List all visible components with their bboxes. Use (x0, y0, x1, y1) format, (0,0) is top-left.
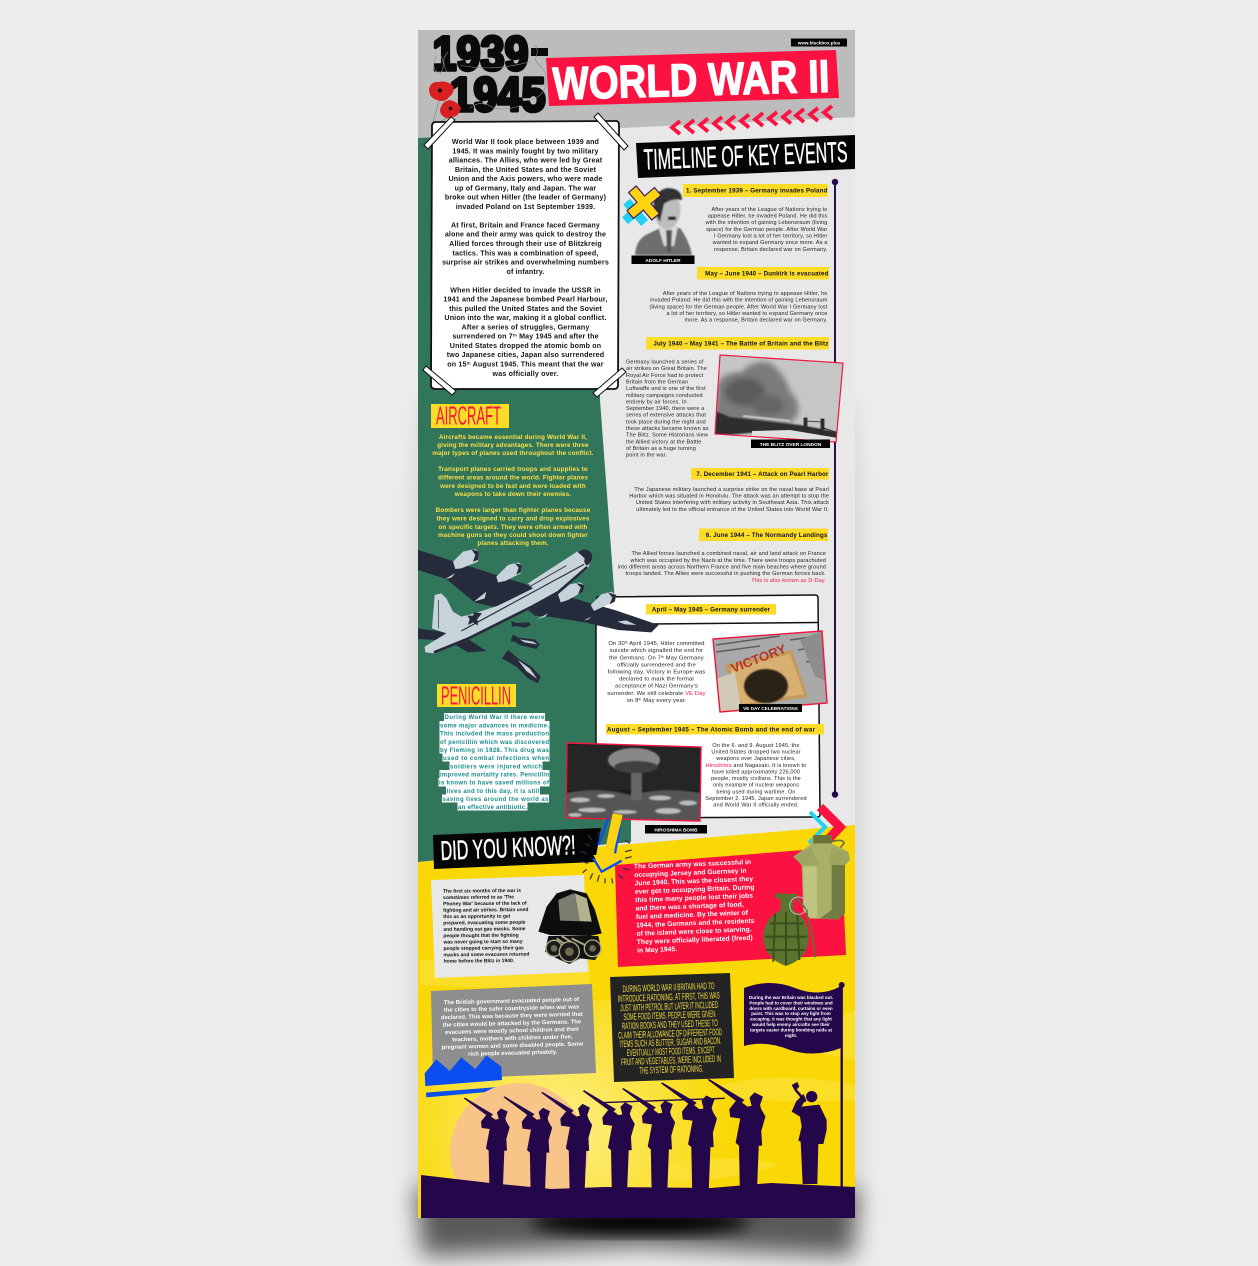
aircraft text: Transport planes carried troops and supplies to (438, 466, 588, 473)
bugler (792, 1082, 827, 1184)
did you know banner (433, 828, 601, 869)
aircraft text: weapons to take down their enemies. (454, 491, 571, 498)
flag with blackout text: paint. This was to stop any light from (751, 1011, 831, 1016)
panel: red fact (615, 847, 846, 967)
event: September 1939: After years of the League of Nations trying to (711, 207, 828, 213)
panel: red fact: ever got to occupying Britain. During (635, 884, 755, 896)
event: atomic bomb: United States dropped two nuclear (711, 750, 801, 756)
timeline heading banner: TIMELINE OF KEY EVENTS (643, 137, 848, 176)
panel: red fact: They were officially liberated (freed) (637, 935, 753, 946)
flag with blackout text: During the war Britain was blacked out. (749, 995, 833, 1000)
event: Battle of Britain: military campaigns conducted (626, 393, 703, 399)
intro text: After a series of struggles, Germany (462, 323, 589, 331)
panel: rationing fact: INTRODUCE RATIONING. AT FIRST, THIS WAS (618, 990, 720, 1005)
brand tag: www.blackbox.plus (797, 40, 841, 45)
intro text: 1945. It was mainly fought by two military (452, 147, 599, 155)
penicillin text: is known to have saved millions of (439, 781, 550, 787)
event: Germany surrender: surrender. We still celebrate VE Day (607, 691, 706, 697)
event: Battle of Britain (626, 337, 829, 459)
event: September 1939: response, Britain declared war on Germany. (714, 247, 828, 253)
bomb 1 (511, 621, 531, 628)
wing highlights (445, 573, 636, 625)
timeline rule (832, 179, 838, 798)
penicillin heading: PENICILLIN (441, 680, 511, 710)
panel: red fact: June 1940. This was the closest they (634, 876, 753, 887)
timeline heading banner (636, 135, 855, 178)
panel: rationing fact (610, 973, 734, 1082)
event: Battle of Britain: air strikes on Great Britain. The (626, 366, 707, 372)
caption: Hiroshima bomb (645, 825, 707, 834)
panel: red fact: of the island were close to starving. (636, 926, 752, 938)
intro text: surprise air strikes and overwhelming numbers (442, 258, 609, 266)
event: Normandy Landings: 6. June 1944 – The Normandy Landings (706, 532, 828, 539)
event: Battle of Britain: Luftwaffe and is one of the first (626, 386, 706, 392)
panel: red fact: fuel and medicine. By the winter of (636, 910, 749, 921)
panel: phoney war fact: this as an opportunity to get (443, 914, 511, 920)
tape strips (423, 113, 628, 397)
poster drop shadow (410, 400, 864, 1256)
event: Germany surrender: th (661, 655, 664, 659)
sun (450, 1083, 588, 1189)
intro text: Britain, the United States and the Soviet (455, 166, 597, 174)
event: Dunkirk: invaded Poland. He did this with the intention of gaining Lebensraum (650, 298, 828, 304)
panel: phoney war fact: home before the Blitz in 1940. (444, 958, 515, 965)
event: atomic bomb: only example of nuclear weapons (713, 783, 799, 789)
penicillin text (438, 713, 550, 811)
aircraft text: Bombers were larger than fighter planes because (436, 507, 591, 514)
intro text: th (513, 333, 517, 338)
panel: phoney war fact: prepared, evacuating some people (443, 920, 526, 926)
aircraft heading: AIRCRAFT (436, 400, 501, 430)
panel: phoney war fact: was never going to start so many (442, 939, 523, 946)
event: atomic bomb: On the 6. and 9. August 1945, the (712, 743, 800, 749)
aircraft text: major types of planes used throughout the conflict. (432, 450, 594, 457)
icon: canteen (793, 835, 850, 919)
icon: grenade (763, 893, 815, 966)
flag with blackout text: night. (785, 1033, 797, 1038)
panel: evacuation fact: pregnant women and some disabled people. Some (442, 1042, 584, 1051)
event: atomic bomb (606, 724, 824, 809)
flag with blackout text (744, 982, 845, 1189)
right wing (528, 593, 659, 632)
event: atomic bomb: people, mostly civilians. This is the (711, 776, 801, 782)
aircraft text (432, 434, 594, 547)
flag with blackout text: would help enemy aircrafts see their (751, 1022, 830, 1027)
panel: phoney war fact: people stopped carrying their gas (443, 945, 524, 952)
event: Germany surrender: declared to mark the formal (619, 677, 694, 683)
caption: Adolf Hitler: ADOLF HITLER (645, 258, 681, 264)
intro text: alliances. The Allies, who were led by Great (449, 156, 603, 164)
event: Battle of Britain: the Allied victory at the Battle (626, 439, 701, 445)
left wing (418, 550, 535, 608)
intro text: Allied forces through their use of Blitzkreig (449, 240, 602, 248)
intro text: up of Germany, Italy and Japan. The war (455, 184, 596, 192)
event: Battle of Britain: July 1940 – May 1941 – The Battle of Britain and the Blitz (653, 341, 828, 348)
event: Germany surrender: April – May 1945 – Germany surrender (652, 606, 771, 614)
panel: evacuation fact: The British government evacuated people out of (444, 997, 579, 1006)
event: Battle of Britain: September 1940, there were a (626, 406, 705, 412)
intro text: United States dropped the atomic bomb on (450, 342, 601, 350)
intro text: of infantry. (506, 268, 545, 276)
event: Battle of Britain: series of extensive attacks that (626, 413, 706, 419)
ground (421, 1175, 855, 1218)
panel: phoney war fact: people thought that the fighting (443, 933, 519, 939)
background: green section (418, 130, 631, 862)
infographic poster (399, 30, 875, 1266)
intro text: Union and the Axis powers, who were made (449, 175, 602, 183)
event: Germany surrender: following day, Victory in Europe was (608, 670, 705, 676)
panel: surrender and atomic bomb (418, 400, 855, 1221)
panel: rationing fact: JUST WITH PETROL BUT LATER IT INCLUDED (620, 1000, 718, 1014)
intro text: When Hitler decided to invade the USSR in (450, 286, 601, 294)
aircraft text: giving the military advantages. There were three (437, 442, 589, 449)
event: Battle of Britain: entirely by air forces. In (626, 399, 687, 405)
engine nacelles (453, 549, 616, 611)
event: Normandy Landings: troops landed. The Allies were successful in pushing the German forces back. (625, 571, 826, 577)
event: Normandy Landings: The Allied forces launched a combined naval, air and land attack on France (631, 551, 826, 557)
penicillin text: During World War II there were (444, 715, 545, 721)
penicillin text: lives and to this day, it is still (446, 789, 540, 795)
event: Germany surrender: suicide which signalled the end for (610, 648, 703, 654)
bomb 2 (511, 634, 540, 649)
panel: evacuation fact: declared. This was because they were worried that (441, 1012, 583, 1021)
event: Dunkirk: a lot of her territory, so Hitler wanted to expand Germany once (667, 311, 828, 317)
brand tag (791, 38, 847, 46)
panel: evacuation fact: the cities would be attacked by the Germans. The (443, 1019, 582, 1029)
caption: the Blitz: THE BLITZ OVER LONDON (760, 442, 822, 448)
panel: rationing fact: SOME FOOD ITEMS. PEOPLE WERE GIVEN (623, 1009, 716, 1023)
intro text: this pulled the United States and the Soviet (449, 305, 602, 313)
event: Germany surrender: th (638, 697, 642, 701)
event: Battle of Britain: took place during the night and (626, 419, 706, 425)
years title: 1945 (450, 69, 546, 122)
panel: rationing fact: DURING WORLD WAR II BRITAIN HAD TO (622, 981, 715, 995)
intro text: 1941 and the Japanese bombed Pearl Harbour, (443, 296, 608, 304)
aircraft text: different areas around the world. Fighter planes (438, 474, 588, 481)
event: Pearl Harbor: ultimately led to the official entrance of the United States into World War II. (636, 507, 829, 513)
icon: yellow cross with cyan shadow (616, 178, 669, 232)
event: Normandy Landings (618, 528, 828, 584)
panel: evacuation fact: evacuees were mostly school children and their (445, 1027, 580, 1036)
bomb 3 (502, 650, 541, 683)
panel: introduction (423, 113, 628, 397)
panel: red fact: in May 1945. (637, 946, 677, 955)
intro text: invaded Poland on 1st September 1939. (456, 203, 595, 211)
intro text: World War II took place between 1939 and (452, 138, 599, 146)
panel: rationing fact: THE SYSTEM OF RATIONING. (639, 1064, 704, 1077)
event: Germany surrender: officially surrendered and the (617, 662, 696, 668)
event: Battle of Britain: point in the war. (626, 453, 667, 459)
event: September 1939: 1. September 1939 – Germany invades Poland (686, 188, 828, 195)
panel: phoney war fact: Phoney War' because of the lack of (443, 901, 527, 907)
event: September 1939 (683, 184, 828, 253)
event: Battle of Britain: Germany launched a series of (626, 360, 704, 366)
aircraft text: were designed to be fast and were loaded with (439, 483, 586, 490)
intro text: was officially over. (492, 370, 558, 378)
intro text: broke out when Hitler (the leader of Germany) (445, 194, 607, 202)
event: Germany surrender: on 8 (627, 698, 638, 704)
event: atomic bomb: Hiroshima and Nagasaki. It is known to (706, 763, 806, 769)
event: September 1939: appease Hitler, he invaded Poland. He did this (708, 214, 828, 220)
event: atomic bomb: being used during wartime. On (716, 789, 796, 795)
aircraft text: machine guns so they could shoot down fighter (438, 532, 588, 539)
aircraft text: Aircrafts became essential during World War II, (439, 434, 587, 441)
panel: rationing fact: CLAIM THEIR ALLOWANCE OF DIFFERENT FOOD (618, 1027, 722, 1042)
caption: Hiroshima bomb: HIROSHIMA BOMB (654, 827, 698, 833)
penicillin text: some major advances in medicine. (440, 723, 549, 729)
event: Germany surrender: On 30 (608, 641, 625, 647)
penicillin text: This included the mass production (440, 731, 549, 737)
event: Germany surrender: May Germany (664, 655, 704, 661)
intro text: two Japanese cities, Japan also surrendered (447, 351, 604, 359)
panel: red fact: 1944, the Germans and the residents (636, 918, 755, 929)
event: Normandy Landings: into different areas across Northern France and five main beaches where ground (618, 564, 826, 570)
background: light panel (418, 30, 855, 1218)
intro text: tactics. This was a combination of speed, (452, 249, 599, 257)
intro text: May 1945 and after the (517, 333, 599, 341)
aircraft heading (431, 400, 509, 430)
penicillin text: an effective antibiotic. (458, 805, 527, 811)
panel: red fact: The German army was successful in (634, 859, 751, 870)
event: Normandy Landings: which was occupied by the Nazis at the time. There were troops parachuted (629, 558, 826, 564)
event: September 1939: space) for the German people. After World War (706, 227, 828, 233)
event: Dunkirk: (living space) for the German people. After World War I Germany lost (649, 304, 828, 310)
panel: evacuation fact: the cities to the safer countryside when war was (444, 1004, 579, 1014)
flag with blackout text: escaping. It was thought that any light (750, 1017, 832, 1022)
penicillin text: saving lives around the world as (442, 797, 549, 803)
event: Germany surrender: the Germans. On 7 (609, 655, 661, 661)
panel: phoney war fact: and handing out gas masks. Some (443, 926, 526, 933)
penicillin text: improved mortality rates. Penicillin (440, 772, 549, 778)
panel: evacuation fact: teachers, mothers with children under five, (452, 1034, 573, 1043)
chevron row (672, 106, 832, 134)
photo: Hiroshima bomb (566, 743, 702, 822)
event: Dunkirk (649, 267, 829, 324)
panel: rationing fact: FRUIT AND VEGETABLES, WERE INCLUDED IN (621, 1054, 721, 1068)
penicillin text: used to combat infections when (443, 756, 549, 762)
panel: phoney war fact: fighting and air strikes. Britain used (443, 907, 528, 914)
panel: rationing fact: RATION BOOKS AND THEY USED THESE TO (622, 1018, 718, 1032)
soldier silhouettes (464, 1079, 765, 1189)
years title: 1939 (432, 28, 528, 81)
event: Pearl Harbor: Harbor which was situated in Honolulu. The attack was an attempt to stop the (629, 494, 829, 500)
flag with blackout text: targets easier during bombing raids at (750, 1028, 833, 1033)
panel: phoney war fact: masks and some evacuees returned (444, 952, 529, 958)
intro text: surrendered on 7 (452, 333, 513, 341)
arrow (580, 813, 632, 883)
background: grey header (418, 30, 855, 138)
event: Germany surrender: th (625, 641, 628, 645)
fuselage (425, 550, 592, 653)
intro text: At first, Britain and France faced Germany (451, 221, 600, 229)
panel: rationing fact: EVENTUALLY MOST FOOD ITEMS, EXCEPT (627, 1045, 715, 1059)
panel: phoney war fact: The first six months of the war is (443, 888, 521, 895)
panel: red fact: occupying Jersey and Guernsey in (634, 868, 747, 879)
years title (432, 28, 548, 122)
photo: Adolf Hitler (616, 178, 694, 264)
event: September 1939: with the intention of gaining Lebensraum (living (705, 220, 828, 226)
event: Germany surrender: April 1945, Hitler committed (628, 641, 705, 647)
event: Normandy Landings: This is also known as D-Day. (751, 578, 826, 584)
event: Pearl Harbor: United States interfering with military activity in Southeast Asia. This attack (636, 500, 829, 506)
title banner: WORLD WAR II (552, 50, 830, 109)
panel: red fact: and there was a shortage of food, (635, 901, 744, 913)
tailplane (418, 628, 446, 640)
event: September 1939: wanted to expand Germany once more. As a (712, 240, 828, 246)
event: Germany surrender: May every year. (641, 698, 687, 704)
intro text: on 15 (447, 360, 467, 368)
event: Germany surrender: acceptance of Nazi Germany's (615, 684, 698, 690)
aircraft text: planes attacking them. (477, 540, 549, 547)
aircraft text: they were designed to carry and drop explosives (437, 515, 590, 522)
event: Battle of Britain: of Britain as a huge turning (626, 446, 696, 452)
panel: phoney war fact: sometimes referred to as 'The (443, 894, 514, 901)
event: September 1939: I Germany lost a lot of her territory, so Hitler (714, 234, 828, 240)
photo: the Blitz over London (715, 355, 843, 448)
panel: evacuation fact: rich people evacuated privately. (468, 1050, 558, 1058)
event: Germany surrender (607, 604, 776, 704)
intro text: th (467, 360, 471, 366)
background: yellow section (418, 825, 855, 1218)
event: Battle of Britain: Britain from the German (626, 380, 688, 386)
event: Pearl Harbor: 7. December 1941 – Attack on Pearl Harbor (696, 471, 829, 478)
flag with blackout text: doors with cardboard, curtains or even (749, 1006, 833, 1011)
icon: gas mask (538, 889, 602, 964)
intro text (442, 138, 609, 378)
poppies (429, 82, 461, 123)
event: atomic bomb: September 2. 1945, Japan surrendered (705, 796, 807, 802)
photo: VE day newspaper: VICTORY (729, 641, 789, 676)
photo: VE day newspaper (713, 631, 827, 712)
caption: VE day: VE DAY CELEBRATIONS (743, 706, 798, 711)
penicillin text: soldiers were injured which (450, 764, 542, 770)
intro text: August 1945. This meant that the war (471, 360, 604, 368)
event: atomic bomb: have killed approximately 226,000 (712, 769, 800, 775)
intro text: alone and their army was quick to destroy the (445, 231, 606, 239)
did you know banner: DID YOU KNOW?! (440, 830, 576, 866)
icon: blue crown (425, 1055, 503, 1097)
event: Battle of Britain: The Blitz. Some Historians view (626, 433, 708, 439)
event: Dunkirk: After years of the League of Nations trying to appease Hitler, he (663, 291, 828, 297)
event: Pearl Harbor (629, 468, 829, 513)
event: Dunkirk: more. As a response, Britain declared war on Germany. (685, 318, 828, 324)
event: Battle of Britain: Royal Air Force had to protect (626, 373, 704, 379)
event: atomic bomb: weapons over Japanese cities, (715, 756, 796, 762)
panel: evacuation fact (431, 984, 596, 1079)
penicillin text: of penicillin which was discovered (440, 740, 549, 746)
icon: chevrons (809, 807, 840, 845)
event: atomic bomb: August – September 1945 – The Atomic Bomb and the end of war (607, 727, 816, 734)
intro text: Union into the war, making it a global conflict. (444, 314, 607, 322)
penicillin heading (437, 680, 516, 710)
penicillin text: by Fleming in 1928. This drug was (440, 748, 550, 754)
panel: red fact: this time many people lost their jobs (635, 893, 753, 904)
event: atomic bomb: and World War II officially ended. (713, 803, 799, 809)
aircraft text: on specific targets. They were often armed with (438, 524, 588, 531)
event: Pearl Harbor: The Japanese military launched a surprise strike on the naval base at Pearl (634, 487, 829, 493)
illustration: bomber plane (418, 549, 659, 683)
flag with blackout text: People had to cover their windows and (749, 1000, 833, 1005)
panel: phoney war fact (431, 875, 588, 978)
event: Battle of Britain: these attacks became known as (626, 426, 709, 432)
panel: rationing fact: ITEMS SUCH AS BUTTER, SUGAR AND BACON. (619, 1036, 722, 1050)
event: Dunkirk: May – June 1940 – Dunkirk is evacuated (705, 270, 829, 278)
